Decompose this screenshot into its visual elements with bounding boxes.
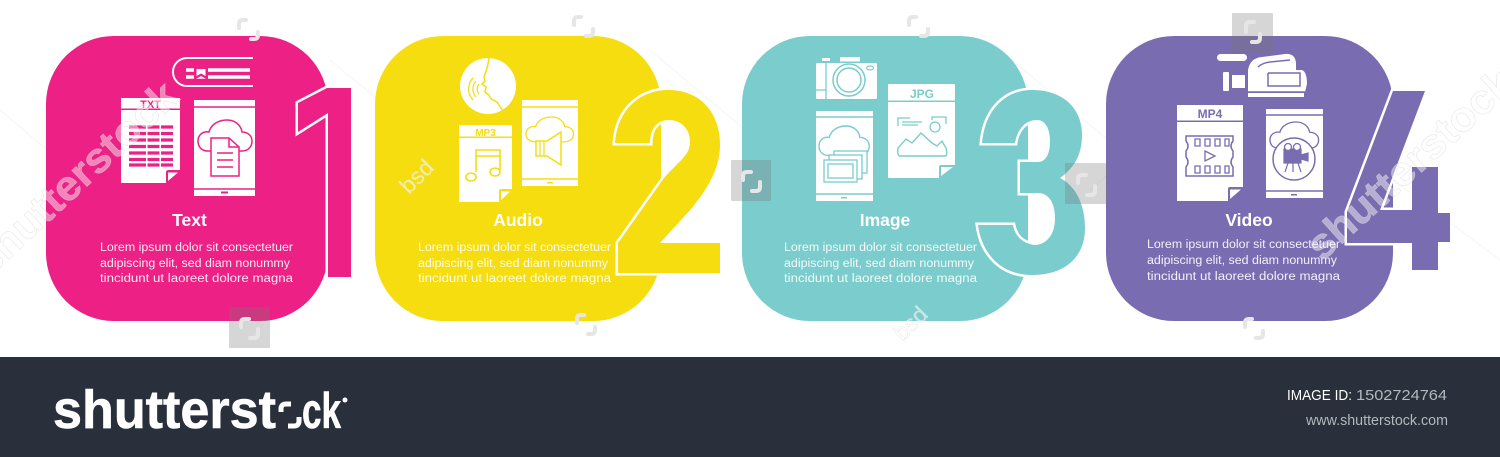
icon: video camera bbox=[1217, 54, 1307, 97]
icon: JPG document: JPG bbox=[910, 87, 934, 101]
text block: Image bbox=[784, 242, 978, 285]
watermark: bsd audio panel: bsd bbox=[394, 154, 439, 199]
heading: Video: Video bbox=[1225, 210, 1273, 230]
text block: Video bbox=[1147, 239, 1341, 283]
text block: Image: adipiscing elit, sed diam nonummy bbox=[784, 258, 974, 270]
logo: shutterstock: shutterst bbox=[53, 380, 276, 440]
text block: Video: adipiscing elit, sed diam nonummy bbox=[1147, 255, 1337, 267]
website url: www.shutterstock.com bbox=[1305, 413, 1448, 429]
watermark: bsd image panel: bsd bbox=[888, 301, 933, 346]
number 1 bbox=[298, 88, 351, 277]
icon: camera bbox=[816, 57, 877, 99]
text block: Audio: tincidunt ut laoreet dolore magna bbox=[418, 273, 612, 285]
faint watermark lines bbox=[0, 50, 1500, 300]
number 2 bbox=[615, 90, 720, 273]
footer bar bbox=[0, 357, 1500, 457]
icon: JPG document bbox=[888, 84, 956, 179]
text block: Text: tincidunt ut laoreet dolore magna bbox=[100, 273, 294, 285]
icon: MP4 document bbox=[1177, 105, 1244, 202]
icon: TXT document bbox=[121, 98, 181, 184]
text block: Text: adipiscing elit, sed diam nonummy bbox=[100, 258, 290, 270]
text block: Text: Lorem ipsum dolor sit consectetuer bbox=[100, 242, 293, 254]
text block: Image: tincidunt ut laoreet dolore magna bbox=[784, 273, 978, 285]
number 3 bbox=[978, 90, 1085, 275]
number 4 bbox=[1347, 91, 1450, 270]
icon: speaking head bbox=[460, 58, 516, 114]
text block: Audio: adipiscing elit, sed diam nonummy bbox=[418, 258, 608, 270]
panel: audio bbox=[375, 36, 661, 321]
image id bbox=[1287, 387, 1447, 404]
icon: tablet with cloud document bbox=[194, 100, 255, 196]
icon: tablet with cloud film camera bbox=[1266, 109, 1323, 198]
icon: MP3 document bbox=[459, 125, 513, 203]
icon: MP4 document: MP4 bbox=[1198, 107, 1223, 121]
image id: 1502724764 bbox=[1356, 387, 1447, 404]
icon: tablet with cloud images bbox=[816, 111, 873, 201]
icon: tablet with cloud speaker bbox=[522, 100, 578, 186]
heading: Image: Image bbox=[860, 210, 911, 230]
watermark: bracket logos bbox=[239, 17, 1263, 338]
panel: video bbox=[1106, 36, 1393, 321]
icon: MP3 document: MP3 bbox=[475, 128, 496, 139]
watermark: grey squares bbox=[229, 13, 1273, 348]
text block: Video: tincidunt ut laoreet dolore magna bbox=[1147, 271, 1341, 283]
text block: Image: Lorem ipsum dolor sit consectetuer bbox=[784, 242, 977, 254]
icon: book bbox=[173, 58, 253, 86]
image id: IMAGE ID: bbox=[1287, 387, 1352, 404]
panel: text bbox=[46, 36, 328, 321]
panel: image bbox=[742, 36, 1028, 321]
heading: Audio: Audio bbox=[493, 210, 543, 230]
heading: Text: Text bbox=[172, 210, 207, 230]
text block: Video: Lorem ipsum dolor sit consectetuer bbox=[1147, 239, 1340, 251]
text block: Audio bbox=[418, 242, 612, 285]
icon: TXT document: TXT bbox=[140, 99, 161, 111]
text block: Audio: Lorem ipsum dolor sit consectetuer bbox=[418, 242, 611, 254]
text block: Text bbox=[100, 242, 294, 285]
logo: shutterstock: ck bbox=[302, 383, 341, 439]
